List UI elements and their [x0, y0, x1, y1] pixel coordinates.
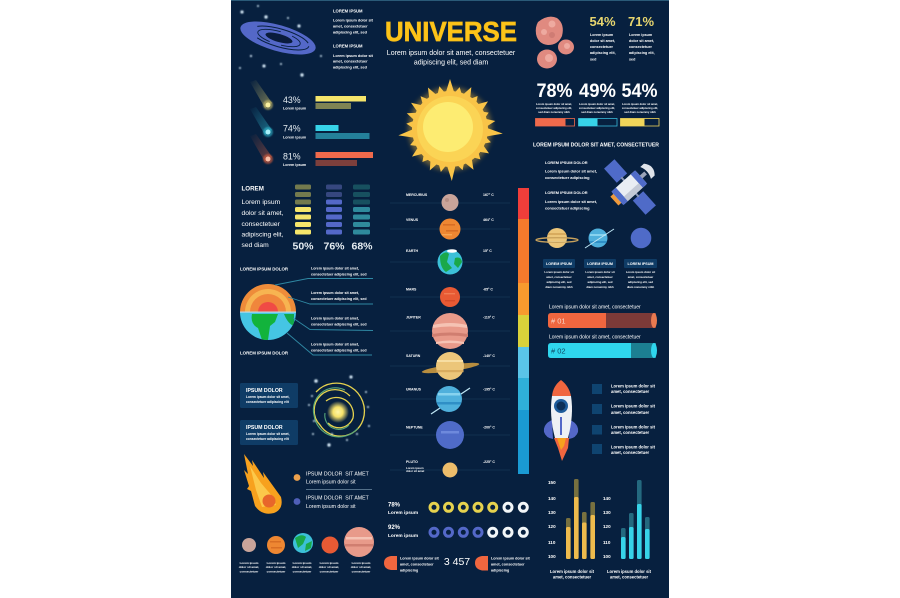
pluto	[406, 460, 495, 478]
satellite text	[545, 160, 597, 210]
stat 71% yellow: dolor sit amet,	[629, 39, 654, 43]
planet caption 1: amet, consectetuer	[546, 275, 573, 279]
stat 71% yellow: consectetuer	[629, 45, 653, 49]
icon: rocket	[544, 380, 578, 461]
planet caption 2: Lorem ipsum dolor sit	[585, 270, 615, 274]
callout left	[384, 556, 439, 572]
venus: VENUS	[406, 218, 419, 222]
callout right: adipiscing	[491, 568, 509, 572]
bar chart cyan: 140	[603, 496, 611, 501]
satellite text: consectetuer adipiscing	[545, 206, 590, 210]
planet 3: Lorem ipsum	[293, 561, 312, 565]
planet 3: consectetuer	[293, 570, 312, 574]
galaxy text: adipiscing elit, sed	[333, 66, 368, 70]
subtitle: Lorem ipsum dolor sit amet, consectetuer	[387, 50, 516, 57]
icon: red comet	[250, 134, 273, 164]
callout right: Lorem ipsum dolor sit	[491, 556, 530, 560]
saturn: SATURN	[406, 354, 421, 358]
earth labels: consectetuer adipiscing elit, sed	[311, 322, 367, 326]
stat 54% with bar: consectetuer adipiscing elit,	[622, 106, 658, 110]
planet caption 2	[584, 259, 616, 289]
planet caption 2: diam nonummy nibh	[586, 285, 614, 289]
planet 4: consectetuer	[320, 570, 339, 574]
stat 54% with bar	[620, 81, 659, 126]
galaxy text: LOREM IPSUM	[333, 44, 363, 48]
planet caption 3	[624, 259, 657, 289]
planet 5	[344, 527, 374, 574]
callout left: adipiscing	[400, 568, 418, 572]
icon: satellite	[594, 144, 673, 224]
stat 78% with bar: Lorem ipsum dolor sit amet,	[536, 102, 572, 106]
bar chart yellow	[548, 479, 595, 580]
progress tube 01	[548, 304, 657, 328]
mars	[406, 287, 493, 307]
bar chart cyan	[603, 480, 652, 580]
stat 78% with bar: 78%	[536, 81, 573, 102]
earth labels: Lorem ipsum dolor sit amet,	[311, 342, 359, 346]
stat 71% yellow: Lorem ipsum	[629, 33, 653, 37]
stat 43%	[283, 95, 366, 110]
stat 74%: 74%	[283, 124, 301, 134]
planet caption 3: diam nonummy nibh	[627, 285, 654, 289]
stat 54% yellow: dolor sit amet,	[590, 39, 615, 43]
level column 76%: 76%	[323, 240, 345, 252]
pluto: Lorem ipsum	[406, 466, 424, 470]
icon: sun	[398, 79, 503, 181]
planet 1: dolor sit amet,	[239, 565, 259, 569]
orbit lines	[390, 203, 510, 470]
bar chart cyan: 130	[603, 510, 611, 515]
icon: cyan comet	[250, 107, 273, 137]
mercury: 167° C	[483, 193, 494, 197]
jupiter: JUPITER	[406, 316, 421, 320]
stat 54% yellow: 54%	[589, 14, 616, 29]
subtitle	[387, 50, 516, 66]
callout right: amet, consectetuer	[491, 562, 525, 566]
planet 3: dolor sit amet,	[292, 565, 312, 569]
planet 5: Lorem ipsum	[352, 561, 371, 565]
bar chart yellow: Lorem ipsum dolor sit	[550, 569, 595, 574]
rocket legend: amet, consectetuer	[611, 430, 650, 435]
subtitle: adipiscing elit, sed diam	[414, 60, 488, 66]
rocket legend: amet, consectetuer	[611, 410, 650, 415]
ring gauge 92%	[388, 525, 527, 539]
progress tube 02: # 02	[551, 346, 566, 356]
planet caption 3: Lorem ipsum dolor sit	[626, 270, 655, 274]
connector lines	[275, 278, 373, 355]
planet row	[239, 527, 374, 574]
galaxy text: Lorem ipsum dolor sit	[333, 18, 374, 22]
bar chart cyan: amet, consectetuer	[610, 574, 648, 580]
earth: EARTH	[406, 249, 419, 253]
planet caption 3: amet, consectetuer	[628, 275, 654, 279]
planet caption 3: LOREM IPSUM	[627, 262, 654, 266]
neptune: -200° C	[483, 426, 495, 430]
icon: meteor	[244, 454, 282, 514]
heading: right column: LOREM IPSUM DOLOR SIT AMET, CONSECTETUER	[533, 142, 659, 148]
number 3 457: 3 457	[444, 556, 470, 568]
mars: -65° C	[483, 288, 493, 292]
ipsum dolor box 2	[240, 420, 298, 445]
planet 1	[239, 538, 259, 574]
venus	[406, 218, 494, 240]
stat 54% yellow: sed	[590, 58, 597, 62]
stat 49% with bar: Lorem ipsum dolor sit amet,	[579, 102, 615, 106]
icon: uranus small	[585, 228, 614, 248]
intro text: consectetuer	[242, 221, 281, 228]
planet caption 1	[543, 259, 575, 289]
stat 78% with bar: consectetuer adipiscing elit,	[536, 106, 572, 110]
ipsum dolor box 1: consectetuer adipiscing elit	[246, 400, 290, 404]
neptune: NEPTUNE	[406, 426, 423, 430]
panel: lorem level chart	[242, 184, 373, 252]
earth labels: consectetuer adipiscing elit, sed	[311, 272, 367, 276]
rocket legend: Lorem ipsum dolor sit	[611, 404, 656, 408]
satellite text: Lorem ipsum dolor sit amet,	[545, 199, 597, 204]
earth labels: Lorem ipsum dolor sit amet,	[311, 291, 359, 295]
planet caption 1: LOREM IPSUM	[546, 262, 572, 266]
intro text: sed diam	[242, 242, 269, 249]
intro text	[242, 186, 284, 249]
stat 78% with bar	[536, 81, 574, 126]
earth: 15° C	[483, 249, 492, 253]
panel: solar system	[390, 193, 510, 478]
title: UNIVERSE	[385, 16, 517, 47]
galaxy text	[333, 8, 374, 70]
planet 5: dolor sit amet,	[351, 565, 371, 569]
heading bottom: LOREM IPSUM DOLOR	[240, 350, 289, 356]
galaxy text: amet, consectetuer	[333, 60, 368, 64]
galaxy text: LOREM IPSUM	[333, 8, 363, 14]
planet 4	[319, 536, 339, 574]
planet 2: Lorem ipsum	[267, 561, 286, 565]
uranus: URANUS	[406, 388, 422, 392]
icon: neptune small	[631, 228, 651, 248]
stat 54% yellow: consectetuer	[590, 45, 614, 49]
planet caption 1: diam nonummy nibh	[545, 285, 573, 289]
saturn: -140° C	[483, 354, 495, 358]
bar chart yellow: 110	[548, 540, 556, 545]
bar chart yellow: 140	[548, 496, 556, 501]
satellite text: Lorem ipsum dolor sit amet,	[545, 168, 597, 174]
mercury: MERCURIUS	[406, 193, 428, 197]
galaxy text: adipiscing elit, sed	[333, 30, 368, 34]
background panel	[231, 0, 669, 598]
bar chart cyan: 120	[603, 524, 611, 529]
intro text: Lorem ipsum	[242, 199, 281, 206]
ring gauge 78%: Lorem ipsum	[388, 510, 418, 516]
spiral galaxy with stars	[237, 5, 322, 77]
pluto: dolor sit amet	[406, 469, 424, 473]
rocket legend: amet, consectetuer	[611, 450, 650, 455]
bar chart cyan: 100	[603, 554, 611, 559]
planet 1: Lorem ipsum	[240, 561, 259, 565]
panel: asteroids	[536, 17, 574, 69]
satellite text: consectetuer adipiscing	[545, 175, 590, 180]
ipsum dolor box 1: Lorem ipsum dolor sit amet,	[246, 395, 290, 399]
stat 71% yellow	[628, 14, 655, 62]
stat 74%: Lorem ipsum	[283, 136, 307, 140]
planet caption 3: adipiscing elit, sed	[628, 280, 653, 284]
icon: yellow comet	[250, 80, 273, 110]
uranus: -195° C	[483, 388, 495, 392]
satellite text: LOREM IPSUM DOLOR	[545, 160, 588, 165]
progress tube 02	[548, 334, 657, 358]
rocket legend: Lorem ipsum dolor sit	[611, 444, 656, 450]
stat 43%: Lorem ipsum	[283, 106, 307, 110]
rocket legend: amet, consectetuer	[611, 389, 650, 394]
comet bars	[250, 80, 373, 167]
earth labels: consectetuer adipiscing elit, sed	[311, 348, 367, 352]
icon: spiral galaxy	[308, 375, 370, 447]
stat 71% yellow: sed	[629, 58, 636, 62]
stat 71% yellow: adipiscing elit,	[629, 51, 655, 55]
temperature scale bar	[518, 188, 529, 474]
progress tube 02: Lorem ipsum dolor sit amet, consectetuer	[549, 334, 641, 340]
mars: MARS	[406, 288, 417, 292]
planet 3	[292, 533, 313, 574]
bar chart cyan: Lorem ipsum dolor sit	[607, 569, 652, 574]
stat 54% with bar: Lorem ipsum dolor sit amet,	[622, 102, 658, 106]
stat 54% yellow: adipiscing elit,	[590, 51, 616, 55]
planet caption 1: Lorem ipsum dolor sit	[544, 270, 574, 274]
rocket legend: Lorem ipsum dolor sit	[611, 424, 656, 430]
stat 54% with bar: sed diam nonummy nibh	[624, 110, 656, 114]
progress tube 01: # 01	[551, 316, 566, 326]
legend: meteor: IPSUM DOLOR SIT AMET	[306, 472, 370, 478]
stat 54% yellow: Lorem ipsum	[590, 33, 614, 37]
earth labels: consectetuer adipiscing elit, sed	[311, 297, 367, 301]
jupiter: -110° C	[483, 316, 495, 320]
legend: meteor: IPSUM DOLOR SIT AMET	[306, 496, 370, 502]
planet caption 2: LOREM IPSUM	[587, 262, 613, 266]
stat 54% with bar: 54%	[622, 81, 658, 102]
legend: meteor	[294, 472, 372, 510]
planet caption 1: adipiscing elit, sed	[546, 280, 572, 284]
stat 49% with bar: consectetuer adipiscing elit,	[579, 106, 615, 110]
callout right	[475, 556, 530, 572]
ipsum dolor box 2: Lorem ipsum dolor sit amet,	[246, 432, 290, 436]
planet 2: dolor sit amet,	[266, 565, 286, 569]
level column 68%: 68%	[351, 240, 373, 252]
planet 1: consectetuer	[240, 570, 259, 574]
legend: meteor: Lorem ipsum dolor sit	[306, 504, 356, 510]
earth labels: Lorem ipsum dolor sit amet,	[311, 266, 359, 270]
stat 54% yellow	[589, 14, 616, 62]
bar chart cyan: 110	[603, 540, 611, 545]
stat 49% with bar: sed diam nonummy nibh	[581, 110, 613, 114]
planet 2	[266, 536, 286, 574]
pluto: -225° C	[483, 460, 495, 464]
planet caption 2: amet, consectetuer	[587, 275, 614, 279]
pluto: PLUTO	[406, 460, 418, 464]
panel: earth cross-section	[240, 266, 373, 356]
callout left: Lorem ipsum dolor sit	[400, 556, 439, 560]
ipsum dolor box 1	[240, 383, 298, 408]
earth	[406, 249, 492, 274]
intro text: adipiscing elit,	[242, 232, 284, 238]
progress tube 01: Lorem ipsum dolor sit amet, consectetuer	[549, 304, 641, 310]
venus: 464° C	[483, 218, 494, 222]
galaxy text: amet, consectetuer	[333, 24, 368, 28]
stat 81%	[283, 152, 373, 167]
ring gauge 92%: Lorem ipsum	[388, 533, 418, 539]
legend: meteor: Lorem ipsum dolor sit	[306, 480, 356, 486]
uranus	[406, 386, 495, 414]
rocket legend: Lorem ipsum dolor sit	[611, 384, 656, 388]
stat 43%: 43%	[283, 95, 301, 105]
bar chart yellow: 100	[548, 554, 556, 559]
bar chart yellow: amet, consectetuer	[553, 574, 591, 580]
ipsum dolor box 2: consectetuer adipiscing elit	[246, 437, 290, 441]
ring gauge 92%: 92%	[388, 525, 401, 531]
planet 2: consectetuer	[267, 570, 286, 574]
stat 81%: Lorem ipsum	[283, 163, 307, 167]
galaxy text: Lorem ipsum dolor sit	[333, 54, 374, 58]
stat 81%: 81%	[283, 152, 301, 162]
planet 4: dolor sit amet,	[319, 565, 339, 569]
mercury	[406, 193, 494, 211]
planet 5: consectetuer	[352, 570, 371, 574]
intro text: LOREM	[242, 186, 264, 192]
heading top: LOREM IPSUM DOLOR	[240, 266, 289, 272]
earth layers icon	[240, 284, 296, 340]
ring gauge 78%	[388, 502, 527, 516]
stat 71% yellow: 71%	[628, 14, 654, 29]
ipsum dolor box 1: IPSUM DOLOR	[246, 388, 283, 394]
bar chart yellow: 130	[548, 510, 556, 515]
level column 50%: 50%	[292, 240, 314, 252]
callout left: amet, consectetuer	[400, 562, 434, 566]
planet 4: Lorem ipsum	[320, 561, 339, 565]
planet caption 2: adipiscing elit, sed	[587, 280, 613, 284]
saturn	[406, 352, 495, 380]
jupiter	[406, 313, 495, 349]
satellite text: LOREM IPSUM DOLOR	[545, 190, 588, 195]
earth labels: Lorem ipsum dolor sit amet,	[311, 316, 359, 320]
stat 78% with bar: sed diam nonummy nibh	[538, 110, 570, 114]
bar chart yellow: 120	[548, 524, 556, 529]
stat 49% with bar	[578, 81, 617, 126]
neptune	[406, 421, 495, 449]
ipsum dolor box 2: IPSUM DOLOR	[246, 425, 283, 431]
bar chart yellow: 150	[548, 480, 556, 485]
stat 74%	[283, 124, 370, 140]
intro text: dolor sit amet,	[242, 210, 284, 217]
icon: saturn small	[536, 228, 578, 248]
ring gauge 78%: 78%	[388, 502, 401, 508]
earth labels	[311, 266, 367, 352]
rocket legend	[592, 384, 656, 455]
stat 49% with bar: 49%	[579, 81, 616, 102]
